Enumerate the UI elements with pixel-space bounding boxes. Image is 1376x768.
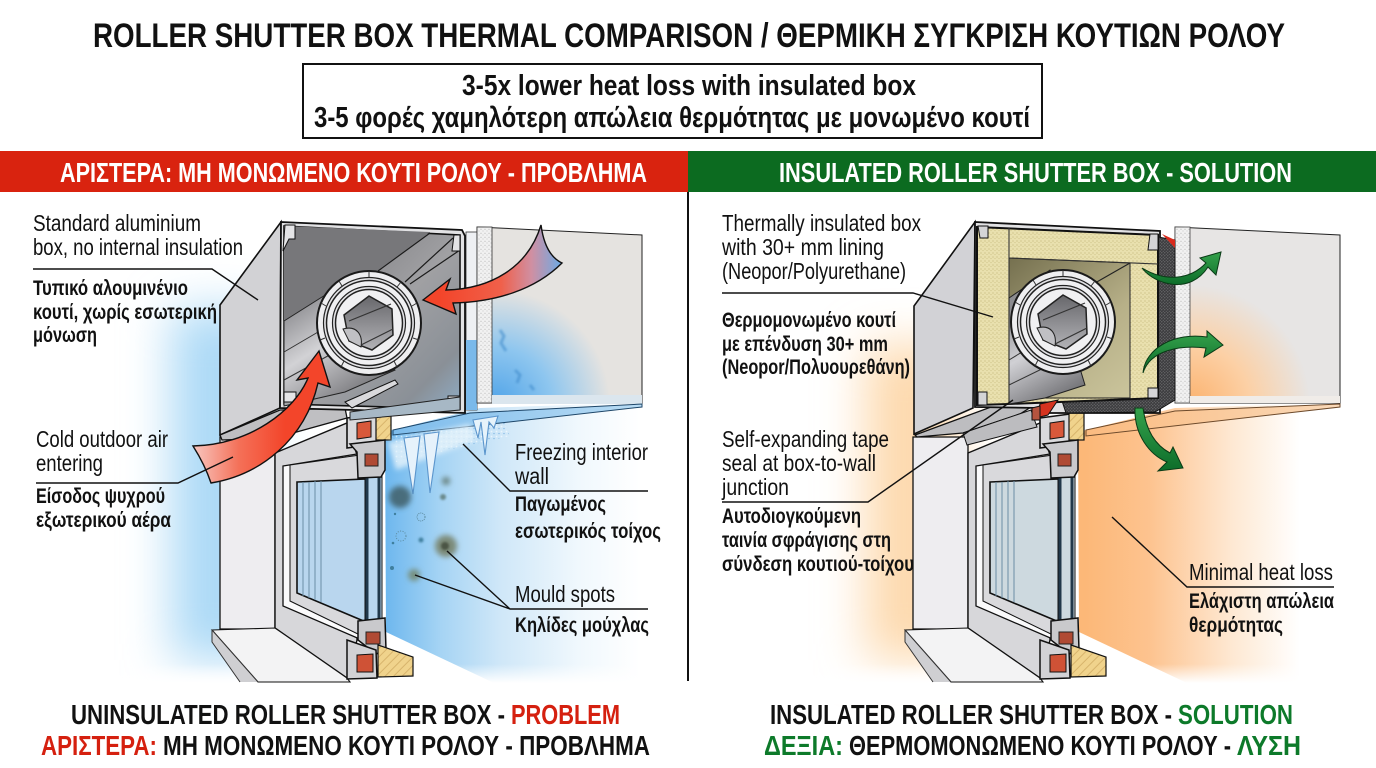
caption: problem: ΜΗ ΜΟΝΩΜΕΝΟ ΚΟΥΤΙ ΡΟΛΟΥ - ΠΡΟΒΛΗΜΑ: [163, 730, 650, 761]
label: freezing interior wall: wall: [514, 463, 549, 489]
aluminium box: [220, 222, 465, 440]
label: freezing interior wall: εσωτερικός τοίχος: [515, 520, 661, 543]
label: mould spots: Mould spots: [515, 581, 615, 607]
callout: heat loss summary: 3-5 φορές χαμηλότερη απώλεια θερμότητας με μονωμένο κουτί: [314, 102, 1030, 134]
caption: solution: ΘΕΡΜΟΜΟΝΩΜΕΝΟ ΚΟΥΤΙ ΡΟΛΟΥ -: [849, 730, 1231, 761]
label: freezing interior wall: Freezing interior: [515, 439, 648, 465]
label: standard aluminium box: box, no internal insulation: [33, 234, 243, 260]
panel: insulated box illustration: [800, 222, 1376, 704]
upper wall with foam: [393, 227, 642, 435]
icicles and frost: [388, 416, 498, 494]
label: cold outdoor air: Είσοδος ψυχρού: [36, 485, 165, 508]
label: self-expanding tape seal: Αυτοδιογκούμενη: [722, 505, 861, 528]
label: thermally insulated box: Thermally insulated box: [722, 210, 921, 236]
heading band: problem: ΑΡΙΣΤΕΡΑ: ΜΗ ΜΟΝΩΜΕΝΟ ΚΟΥΤΙ ΡΟΛΟΥ - ΠΡΟΒΛΗΜΑ: [60, 157, 647, 188]
insulated box: [914, 222, 1175, 445]
arrow: minimal heat escape lower: [1135, 408, 1183, 471]
label: thermally insulated box: Θερμομονωμένο κουτί: [722, 309, 896, 332]
callout: heat loss summary: 3-5x lower heat loss with insulated box: [462, 70, 916, 102]
label: standard aluminium box: κουτί, χωρίς εσωτερική: [33, 301, 217, 324]
mould spots: [389, 477, 457, 581]
label: mould spots: [415, 551, 649, 637]
caption: solution: [764, 699, 1301, 761]
label: self-expanding tape seal: ταινία σφράγισης στη: [722, 529, 891, 552]
label: cold outdoor air: entering: [36, 450, 103, 476]
frost band under soffit: [392, 412, 510, 462]
label: self-expanding tape seal: [721, 400, 1013, 576]
caption: solution: SOLUTION: [1178, 699, 1293, 730]
label: minimal heat loss: Minimal heat loss: [1189, 559, 1333, 585]
label: cold outdoor air: Cold outdoor air: [36, 426, 168, 452]
caption: solution: ΔΕΞΙΑ:: [764, 730, 843, 761]
warm interior wall: [1078, 403, 1376, 683]
label: thermally insulated box: (Neopor/Πολυουρεθάνη): [722, 356, 910, 379]
arrow: minimal heat escape upper: [1142, 252, 1221, 285]
arrow: warm air escaping upper: [423, 225, 562, 314]
cold glow left of window: [172, 310, 262, 660]
caption: problem: PROBLEM: [511, 699, 620, 730]
caption: solution: INSULATED ROLLER SHUTTER BOX -: [770, 699, 1172, 730]
label: cold outdoor air: εξωτερικού αέρα: [36, 509, 171, 532]
window and sill: [905, 410, 1106, 682]
upper wall with foam: [1086, 227, 1340, 436]
panel: uninsulated box illustration: [60, 222, 687, 704]
label: standard aluminium box: [33, 210, 258, 347]
warm glow left of window: [866, 345, 956, 660]
label: minimal heat loss: θερμότητας: [1189, 614, 1283, 637]
label: standard aluminium box: Τυπικό αλουμινένιο: [33, 277, 188, 300]
panel divider: [687, 192, 689, 681]
heading band: problem: [0, 151, 688, 192]
caption: problem: UNINSULATED ROLLER SHUTTER BOX -: [71, 699, 505, 730]
label: minimal heat loss: [1112, 517, 1334, 637]
heading band: solution: [688, 151, 1376, 192]
bottom fade right: [800, 664, 1376, 704]
label: self-expanding tape seal: Self-expanding tape: [722, 426, 889, 452]
label: thermally insulated box: (Neopor/Polyurethane): [722, 258, 906, 284]
label: thermally insulated box: with 30+ mm lining: [721, 234, 884, 260]
label: freezing interior wall: Παγωμένος: [515, 493, 606, 516]
label: self-expanding tape seal: junction: [721, 474, 789, 500]
label: standard aluminium box: Standard aluminium: [33, 210, 201, 236]
label: freezing interior wall: [463, 439, 661, 543]
window and sill: [212, 410, 413, 682]
label: self-expanding tape seal: seal at box-to-wall: [722, 450, 876, 476]
cold interior wall: [385, 402, 686, 683]
label: thermally insulated box: [721, 210, 993, 379]
label: self-expanding tape seal: σύνδεση κουτιού-τοίχου: [722, 553, 914, 576]
label: cold outdoor air: [36, 426, 233, 532]
caption: solution: ΛΥΣΗ: [1237, 730, 1301, 761]
arrow: cold air entering: [193, 351, 330, 483]
label: mould spots: Κηλίδες μούχλας: [515, 614, 649, 637]
arrow: minimal heat escape middle: [1143, 331, 1223, 373]
label: standard aluminium box: μόνωση: [33, 324, 97, 347]
label: minimal heat loss: Ελάχιστη απώλεια: [1189, 590, 1334, 613]
label: thermally insulated box: με επένδυση 30+ mm: [722, 333, 888, 356]
callout: heat loss summary: [303, 64, 1042, 138]
caption: problem: ΑΡΙΣΤΕΡΑ:: [41, 730, 157, 761]
caption: problem: [41, 699, 650, 761]
bottom fade left: [60, 664, 687, 704]
